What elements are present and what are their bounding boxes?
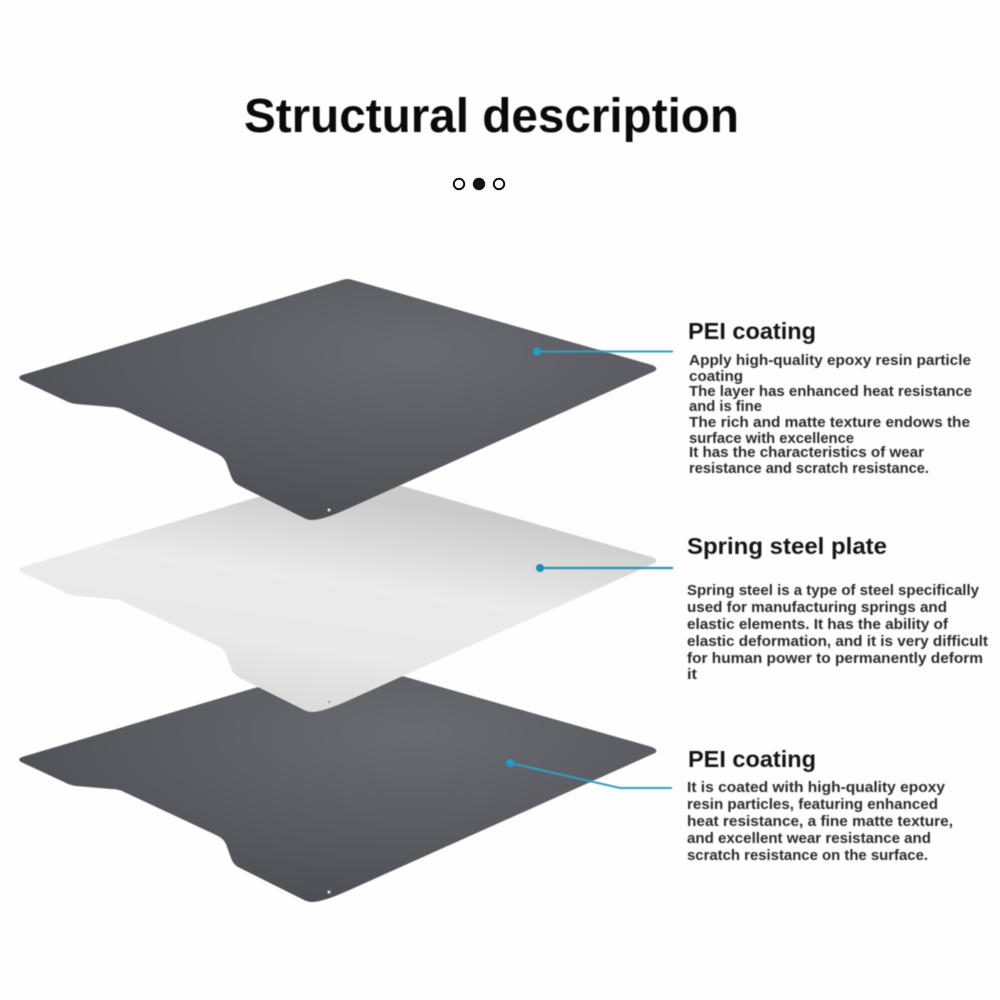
callout line: top PEI coating bbox=[533, 348, 673, 356]
description: PEI coating surface: resin particles, featuring enhanced bbox=[687, 796, 938, 813]
description: PEI coating layer bbox=[689, 352, 972, 477]
pagination dots bbox=[454, 178, 504, 190]
description: spring steel: elastic elements. It has the ability of bbox=[687, 616, 949, 633]
description: PEI coating layer: The rich and matte texture endows the bbox=[689, 414, 970, 431]
callout line: bottom PEI coating bbox=[506, 759, 672, 788]
description: PEI coating surface: It is coated with high-quality epoxy bbox=[687, 779, 946, 796]
description: PEI coating layer: Apply high-quality epoxy resin particle bbox=[689, 352, 971, 369]
title: Structural description bbox=[244, 90, 739, 143]
heading: Spring steel plate: Spring steel plate bbox=[687, 533, 887, 559]
description: PEI coating layer: and is fine bbox=[689, 398, 762, 415]
description: spring steel bbox=[687, 582, 988, 683]
description: spring steel: it bbox=[687, 666, 697, 683]
text block: spring steel plate bbox=[687, 533, 988, 683]
description: spring steel: Spring steel is a type of steel specifically bbox=[687, 582, 980, 599]
callout line: spring steel plate bbox=[536, 564, 673, 572]
text block: top PEI coating bbox=[688, 318, 972, 477]
top plate: PEI coating bbox=[19, 279, 656, 520]
description: PEI coating surface bbox=[687, 779, 953, 864]
heading: PEI coating: PEI coating bbox=[688, 318, 816, 344]
description: spring steel: used for manufacturing springs and bbox=[687, 599, 947, 616]
description: spring steel: for human power to permanently deform bbox=[687, 650, 983, 667]
description: PEI coating surface: and excellent wear resistance and bbox=[687, 830, 931, 847]
heading: PEI coating: PEI coating bbox=[688, 746, 816, 772]
middle plate: spring steel bbox=[19, 471, 656, 712]
description: PEI coating layer: resistance and scratch resistance. bbox=[689, 460, 929, 477]
description: PEI coating layer: The layer has enhanced heat resistance bbox=[689, 383, 972, 400]
description: PEI coating surface: scratch resistance on the surface. bbox=[687, 847, 928, 864]
description: PEI coating layer: surface with excellence bbox=[689, 430, 854, 447]
bottom plate: PEI coating bbox=[19, 661, 656, 902]
text block: bottom PEI coating bbox=[687, 746, 953, 864]
description: PEI coating surface: heat resistance, a fine matte texture, bbox=[687, 813, 953, 830]
description: PEI coating layer: coating bbox=[689, 368, 743, 385]
description: spring steel: elastic deformation, and it is very difficult bbox=[687, 633, 988, 650]
description: PEI coating layer: It has the characteristics of wear bbox=[689, 444, 924, 461]
